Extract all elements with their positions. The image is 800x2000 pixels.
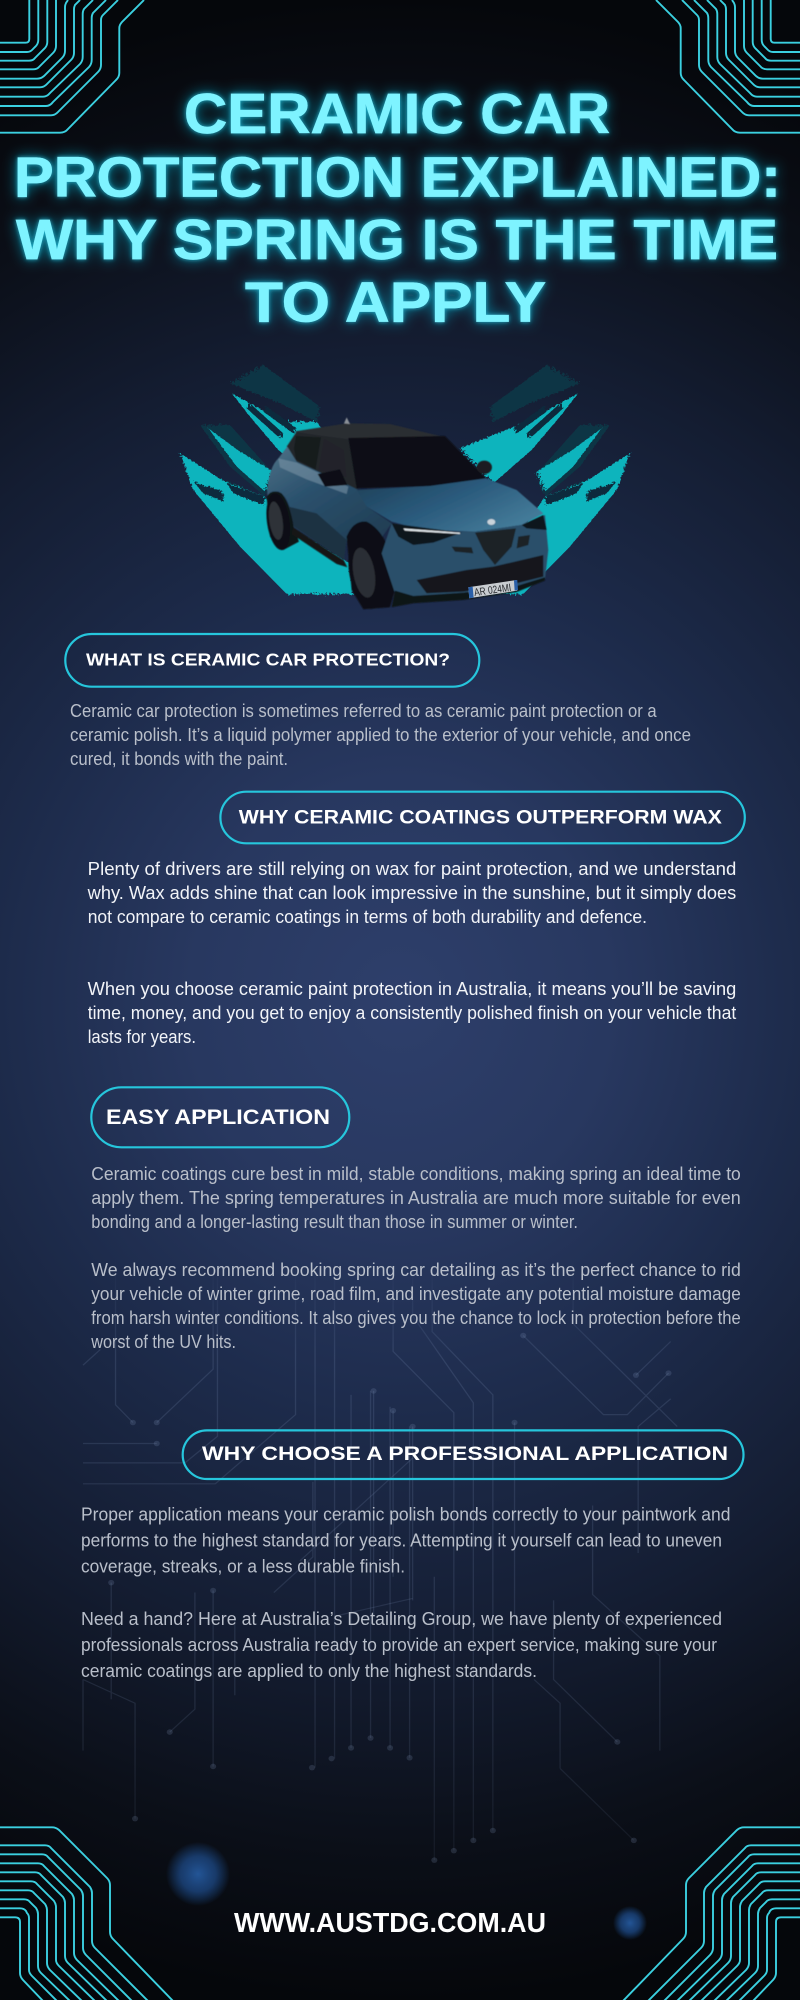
corner circuit lines: top right bbox=[656, 0, 800, 133]
body text: professionals across Australia ready to provide an expert service, making sure your bbox=[81, 1635, 717, 1655]
corner circuit lines: bottom right bbox=[622, 1827, 800, 2000]
glow orb left bbox=[166, 1842, 230, 1906]
heading pill: WHAT IS CERAMIC CAR PROTECTION? bbox=[86, 650, 450, 670]
title: TO APPLY bbox=[245, 270, 546, 334]
corner circuit lines: top left bbox=[0, 0, 144, 133]
body text: lasts for years. bbox=[88, 1027, 196, 1047]
body text: Need a hand? Here at Australia’s Detailing Group, we have plenty of experienced bbox=[81, 1609, 722, 1629]
body text: from harsh winter conditions. It also gives you the chance to lock in protection before the bbox=[91, 1308, 741, 1328]
title: PROTECTION EXPLAINED: bbox=[14, 146, 781, 210]
body text: ceramic coatings are applied to only the highest standards. bbox=[81, 1661, 537, 1681]
body text: not compare to ceramic coatings in terms of both durability and defence. bbox=[88, 907, 647, 927]
car bbox=[263, 417, 548, 612]
body text: Plenty of drivers are still relying on wax for paint protection, and we understand bbox=[88, 859, 736, 879]
heading pill bbox=[183, 1430, 743, 1479]
body text: ceramic polish. It’s a liquid polymer applied to the exterior of your vehicle, and once bbox=[70, 725, 691, 745]
heading pill: WHY CHOOSE A PROFESSIONAL APPLICATION bbox=[202, 1443, 728, 1465]
body text: worst of the UV hits. bbox=[90, 1332, 236, 1352]
title: WHY SPRING IS THE TIME bbox=[16, 208, 778, 272]
body text: coverage, streaks, or a less durable finish. bbox=[81, 1557, 405, 1577]
body text: We always recommend booking spring car detailing as it’s the perfect chance to rid bbox=[91, 1260, 741, 1280]
body text bbox=[87, 859, 736, 1047]
teal paint splash bbox=[180, 365, 630, 594]
section: why ceramic coatings outperform wax bbox=[87, 792, 745, 1047]
body text: cured, it bonds with the paint. bbox=[70, 749, 288, 769]
number plate: AR 024MI bbox=[473, 582, 512, 599]
hero illustration: car on teal paint splash bbox=[180, 365, 630, 612]
body text bbox=[70, 701, 691, 769]
body text bbox=[90, 1164, 741, 1352]
body text: why. Wax adds shine that can look impressive in the sunshine, but it simply does bbox=[87, 883, 736, 903]
body text: apply them. The spring temperatures in Australia are much more suitable for even bbox=[91, 1188, 741, 1208]
glow orb right bbox=[613, 1906, 647, 1940]
website url: WWW.AUSTDG.COM.AU bbox=[234, 1907, 546, 1938]
heading pill: EASY APPLICATION bbox=[106, 1106, 330, 1129]
body text: Proper application means your ceramic polish bonds correctly to your paintwork and bbox=[81, 1505, 730, 1525]
body text: performs to the highest standard for years. Attempting it yourself can lead to uneven bbox=[81, 1531, 722, 1551]
heading pill bbox=[65, 634, 479, 687]
title: CERAMIC CAR bbox=[184, 82, 610, 146]
body text: When you choose ceramic paint protection in Australia, it means you’ll be saving bbox=[88, 979, 736, 999]
corner circuit lines: bottom left bbox=[0, 1827, 174, 2000]
circuit board background pattern bbox=[83, 1260, 677, 1863]
section: what is ceramic car protection bbox=[65, 634, 691, 769]
body text: bonding and a longer-lasting result than those in summer or winter. bbox=[91, 1212, 578, 1232]
heading pill: WHY CERAMIC COATINGS OUTPERFORM WAX bbox=[239, 807, 722, 828]
heading pill bbox=[220, 792, 745, 843]
section: why choose a professional application bbox=[81, 1430, 744, 1681]
body text: time, money, and you get to enjoy a consistently polished finish on your vehicle that bbox=[88, 1003, 736, 1023]
body text: Ceramic coatings cure best in mild, stable conditions, making spring an ideal time to bbox=[91, 1164, 741, 1184]
heading pill bbox=[91, 1087, 349, 1147]
body text: Ceramic car protection is sometimes referred to as ceramic paint protection or a bbox=[70, 701, 658, 721]
title bbox=[14, 82, 781, 334]
body text: your vehicle of winter grime, road film, and investigate any potential moisture damage bbox=[91, 1284, 741, 1304]
body text bbox=[81, 1505, 730, 1681]
section: easy application bbox=[90, 1087, 741, 1352]
